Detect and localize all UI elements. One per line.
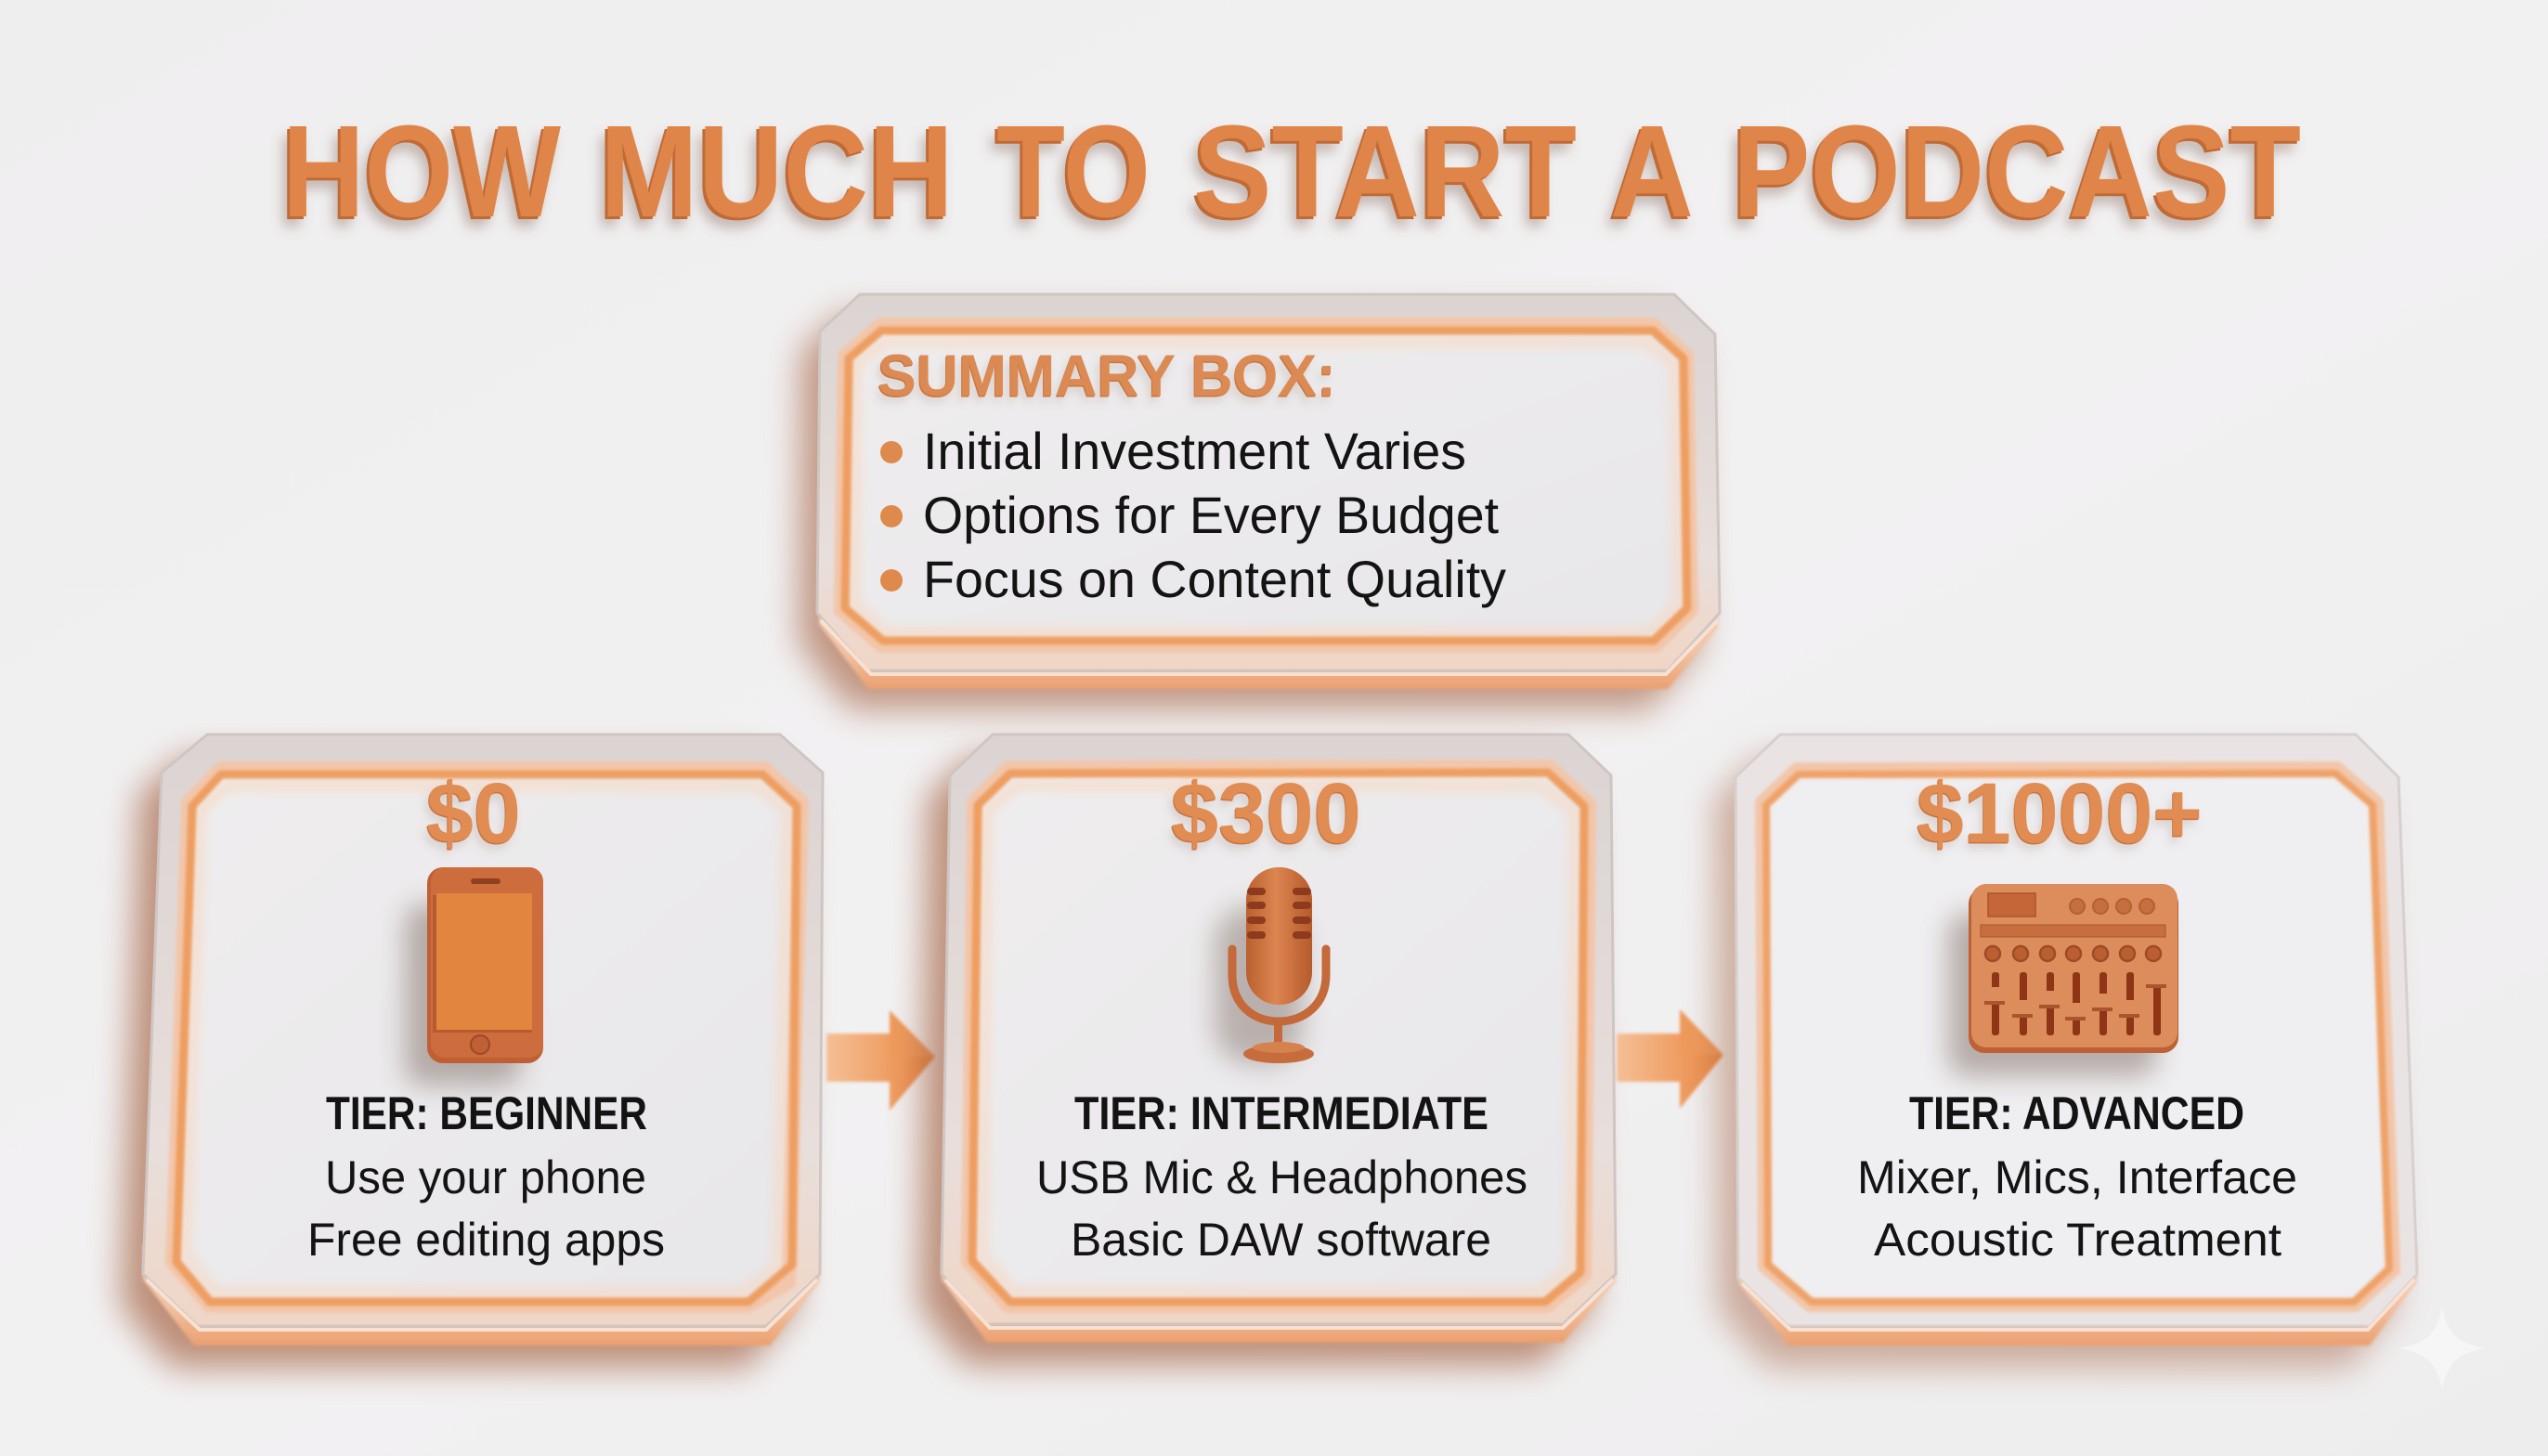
icon: smartphone	[405, 867, 543, 1086]
tier text: advanced: TIER: ADVANCED	[1909, 1087, 2244, 1139]
title: A	[1610, 98, 1694, 244]
price: $300: $300	[1171, 766, 1361, 861]
tier text: advanced: Acoustic Treatment	[1874, 1214, 2282, 1266]
price: $0: $0	[426, 766, 521, 861]
panel: advanced tier	[1715, 734, 2417, 1368]
tier text: intermediate	[1036, 1087, 1528, 1266]
title	[282, 98, 2301, 244]
tier text: beginner: Use your phone	[325, 1151, 646, 1203]
icon: sparkle watermark	[2399, 1307, 2485, 1389]
price: $1000+: $1000+	[1917, 766, 2203, 861]
title: HOW	[282, 98, 561, 244]
summary heading: SUMMARY BOX:	[878, 344, 1336, 409]
panel: intermediate tier	[919, 734, 1616, 1365]
bullet list: Options for Every Budget	[923, 486, 1499, 544]
tier text: beginner: Free editing apps	[307, 1214, 665, 1266]
tier text: intermediate: USB Mic & Headphones	[1036, 1151, 1528, 1203]
title: PODCAST	[1733, 98, 2301, 244]
tier text: advanced	[1857, 1087, 2297, 1266]
title: MUCH	[600, 98, 954, 244]
icon: mixer	[1948, 884, 2178, 1076]
icon: microphone	[1215, 867, 1326, 1064]
title: START	[1193, 98, 1577, 244]
panel: beginner tier	[121, 734, 823, 1368]
tier text: intermediate: TIER: INTERMEDIATE	[1074, 1087, 1488, 1139]
bullet list: Initial Investment Varies	[923, 422, 1466, 480]
arrow: beginner to intermediate	[826, 1010, 935, 1111]
tier text: beginner: TIER: BEGINNER	[326, 1087, 647, 1139]
title: TO	[996, 98, 1150, 244]
tier text: beginner	[307, 1087, 665, 1266]
arrow: intermediate to advanced	[1617, 1009, 1723, 1109]
tier text: advanced: Mixer, Mics, Interface	[1857, 1151, 2297, 1203]
panel: summary box	[799, 294, 1720, 709]
bullet list: Focus on Content Quality	[923, 550, 1506, 608]
tier text: intermediate: Basic DAW software	[1071, 1214, 1491, 1266]
bullet list	[880, 422, 1506, 608]
